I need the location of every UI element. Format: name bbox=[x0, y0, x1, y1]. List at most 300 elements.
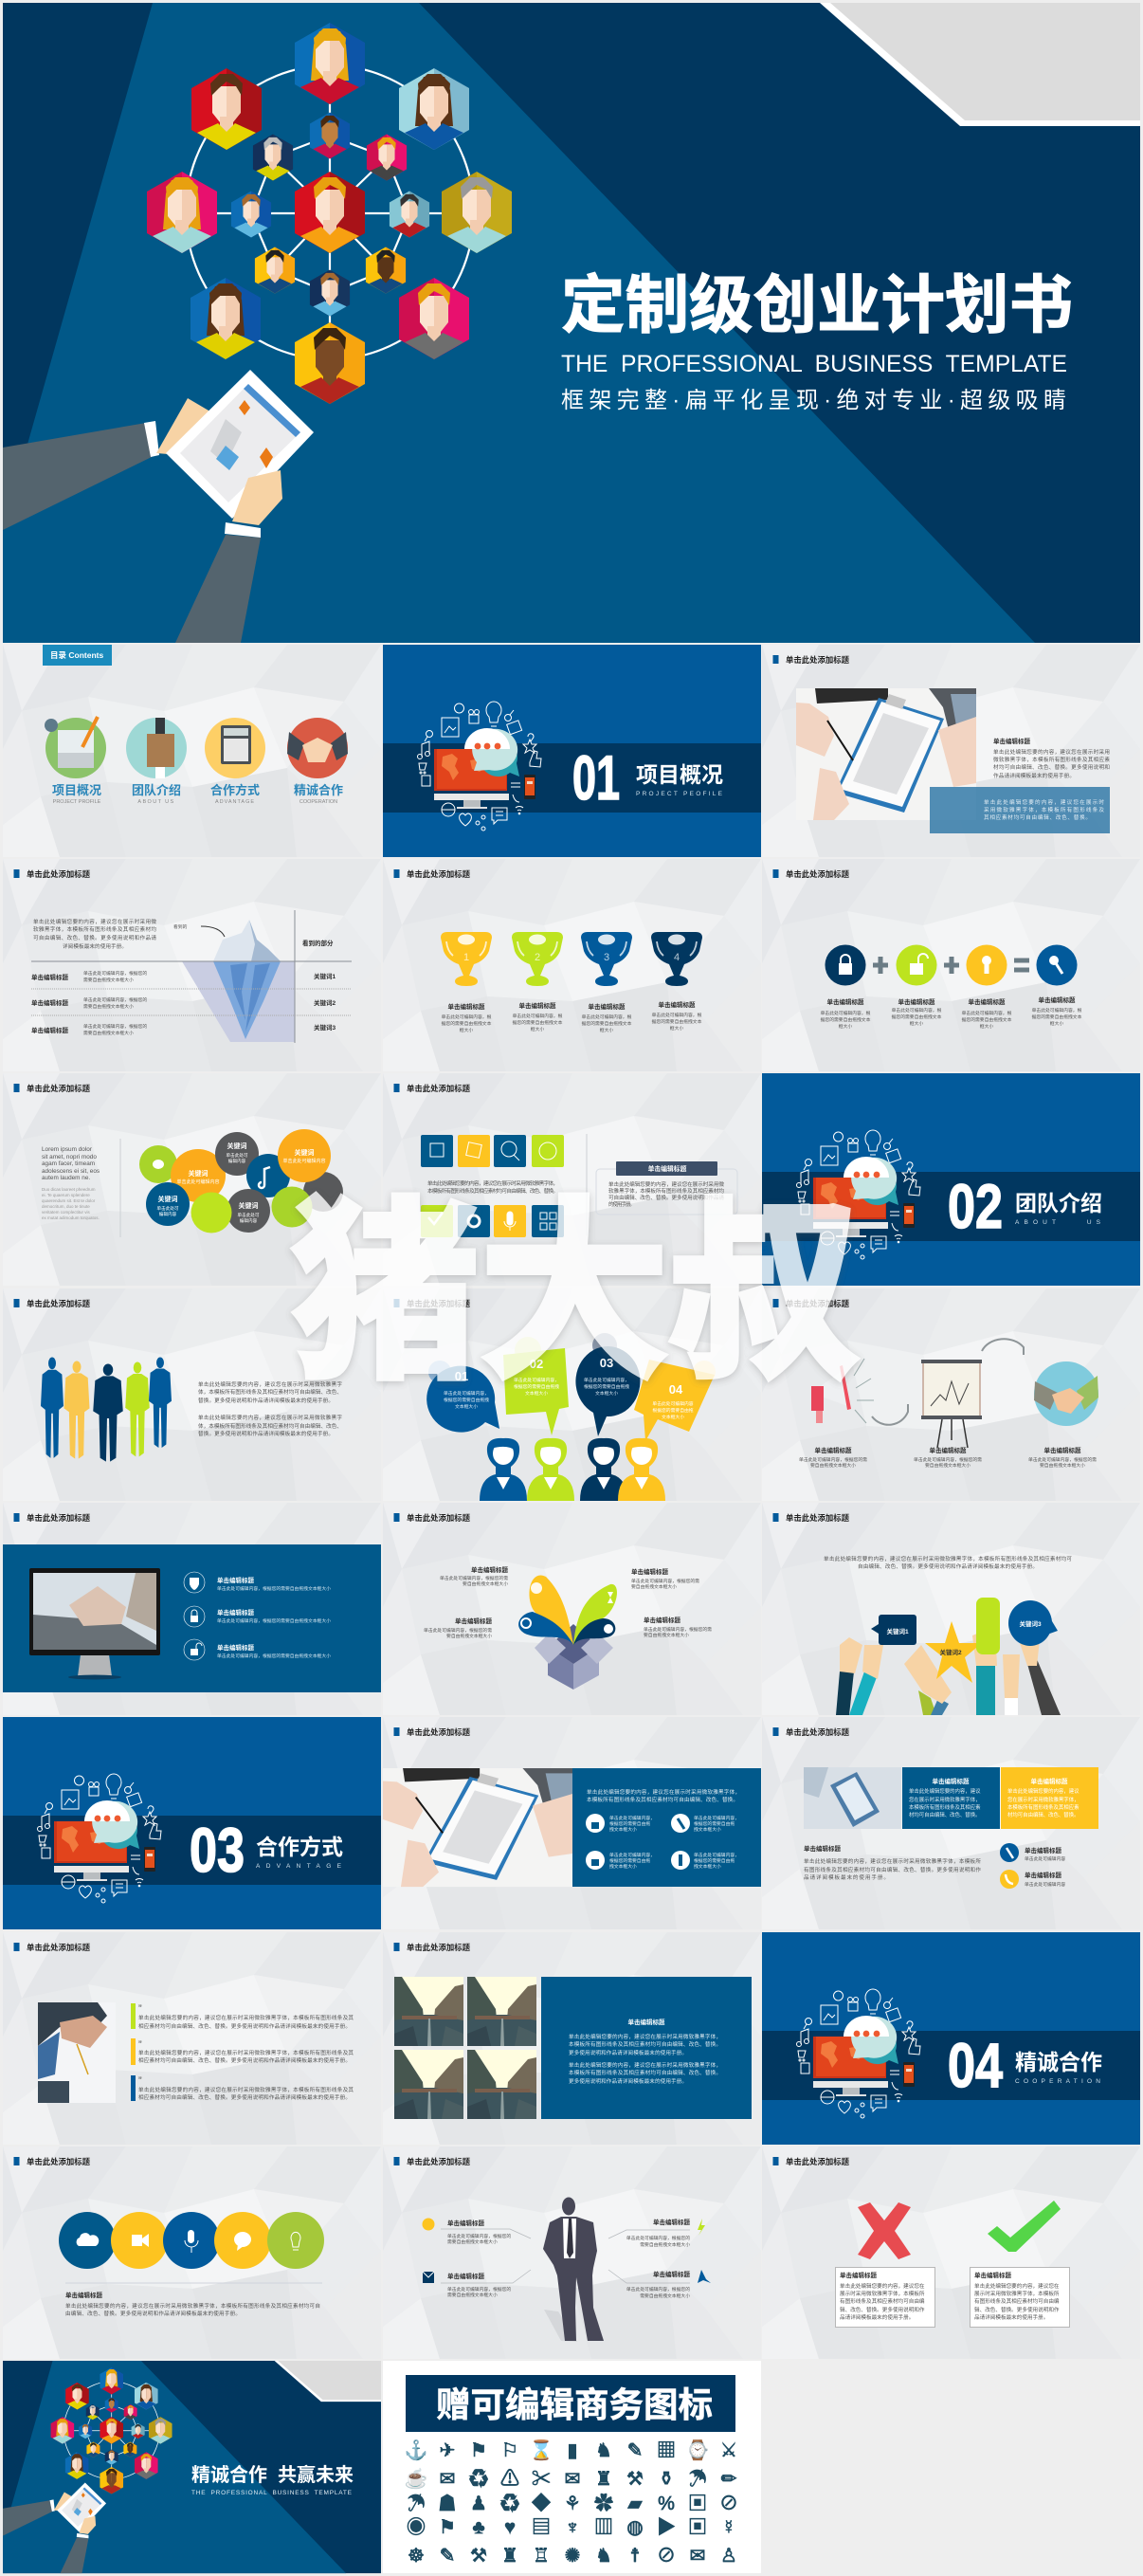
blue card: 单击编辑标题 bbox=[933, 1777, 970, 1785]
icon: megaphone bbox=[811, 1359, 874, 1423]
caption right top: 单击此处可编辑内容，根据您的需 bbox=[631, 1578, 699, 1584]
panel: businessman slide bbox=[383, 2147, 761, 2359]
blue panel: 根据您的需要自由拖 bbox=[694, 1857, 735, 1864]
bubble 1: 01 bbox=[455, 1369, 468, 1383]
closing title: 精诚合作 共赢未来 bbox=[191, 2464, 354, 2486]
contents tag bbox=[43, 645, 112, 666]
note card bbox=[596, 1161, 737, 1215]
tile text: 单击此处编辑您要的内容，建议您在展示时采用微软雅黑字体， bbox=[427, 1179, 558, 1187]
caption left top bbox=[440, 1565, 508, 1587]
panel: speech bubbles slide bbox=[383, 1288, 761, 1501]
equation captions: 框大小 bbox=[839, 1023, 852, 1030]
bubble 3 bbox=[575, 1333, 640, 1436]
icon list: 单击编辑标题 bbox=[1025, 1871, 1061, 1879]
panel: process slide bbox=[762, 1288, 1140, 1501]
trophy captions: 单击此处可编辑内容，根 bbox=[442, 1014, 492, 1020]
iceberg rows: 需要自由拖拽文本框大小 bbox=[83, 1030, 134, 1036]
feature list: 单击此处可编辑内容，根据您的需要自由拖拽文本框大小 bbox=[217, 1617, 331, 1624]
note card: 软雅黑字体，本模板所有图形线条及其相应素材均 bbox=[608, 1187, 724, 1195]
blue panel bbox=[572, 1768, 761, 1887]
arrow bbox=[201, 926, 225, 937]
contents labels: 项目概况 bbox=[52, 783, 101, 797]
caption left bottom: 单击此处可编辑内容，根据您的需 bbox=[424, 1627, 492, 1634]
iceberg rows: 单击编辑标题 bbox=[31, 973, 68, 981]
bubble 4: 根据您的需要自由拖 bbox=[652, 1407, 694, 1414]
callout bottom-left: 单击编辑标题 bbox=[447, 2272, 485, 2280]
icon: project overview laptop bbox=[45, 717, 106, 778]
trophies: 1 bbox=[463, 952, 469, 963]
lorem text: Duo dicas laoreet pheedrum bbox=[42, 1187, 96, 1192]
text block: 作品请详阅模板最末的使用手册。 bbox=[993, 772, 1075, 779]
trophy captions: 单击编辑标题 bbox=[588, 1002, 626, 1011]
keyword 3 bubble: 关键词3 bbox=[1019, 1619, 1042, 1628]
blue card bbox=[902, 1767, 1000, 1829]
trophy captions bbox=[442, 1000, 702, 1033]
keyword 1 bubble bbox=[871, 1615, 916, 1645]
business icon grid: ⚓✈⚑⚐⌛▮♞✎▦⌚⚔ bbox=[405, 2439, 737, 2461]
iceberg text: 单击此处编辑您要的内容，建议您在展示时采用微 bbox=[33, 918, 156, 925]
yellow card: 材均可自由编辑、改色、替换。 bbox=[1007, 1811, 1079, 1818]
blue card: 您在展示时采用微软雅黑字体， bbox=[909, 1796, 980, 1803]
intro text: 单击此处编辑您要的内容，建议您在展示时采用微软雅黑字体，本模板所有图形线条及其相应素材均可 bbox=[824, 1555, 1072, 1562]
slide heading: 单击此处添加标题 bbox=[786, 869, 850, 879]
note card: 可自由编辑、改色、替换。更多使用说明和作品请 bbox=[608, 1194, 724, 1201]
quote text: 相应素材均可自由编辑、改色、替换。更多使用说明和作品请详阅模板最末的使用手册。 bbox=[138, 2056, 351, 2064]
slide heading: 单击此处添加标题 bbox=[27, 1513, 91, 1523]
caption left bottom bbox=[424, 1617, 493, 1639]
equation captions: 单击此处可编辑内容，根 bbox=[962, 1010, 1012, 1016]
trophy captions: 框大小 bbox=[600, 1027, 613, 1033]
contents tag: 目录 Contents bbox=[50, 650, 103, 660]
section title: 合作方式 bbox=[256, 1835, 343, 1859]
bubble 4 bbox=[634, 1360, 716, 1441]
panel: icon set promo bbox=[383, 2361, 761, 2573]
slide heading: 单击此处添加标题 bbox=[27, 1084, 91, 1093]
iceberg text: 详阅模板最末的使用手册。 bbox=[63, 942, 127, 950]
trophy captions: 据您的需要自由拖拽文本 bbox=[652, 1018, 702, 1025]
contents English labels: ADVANTAGE bbox=[215, 799, 255, 805]
bubble cluster: 编辑内容 bbox=[228, 1158, 246, 1164]
bubble 1 bbox=[426, 1361, 499, 1433]
bubble 1: 根据您的需要自由拖拽 bbox=[444, 1397, 489, 1403]
iceberg rows bbox=[31, 970, 147, 1036]
blue panel: 单击此处可编辑内容， bbox=[609, 1852, 655, 1858]
feature list bbox=[184, 1572, 331, 1660]
caption right bottom: 单击编辑标题 bbox=[644, 1616, 680, 1624]
blue panel: 根据您的需要自由拖 bbox=[609, 1820, 650, 1827]
trophy captions: 据您的需要自由拖拽文本 bbox=[442, 1020, 492, 1027]
slide heading: 单击此处添加标题 bbox=[407, 1727, 471, 1737]
bubble cluster: 单击此处可 bbox=[238, 1212, 260, 1218]
note box right: 辑、改色、替换。更多使用说明和作 bbox=[974, 2306, 1060, 2313]
blue band bbox=[3, 1544, 381, 1692]
callout bottom-right bbox=[626, 2270, 711, 2299]
trophies bbox=[441, 932, 702, 986]
left text bbox=[804, 1844, 981, 1881]
trophy captions: 单击此处可编辑内容，根 bbox=[513, 1013, 563, 1019]
section subtitle: ADVANTAGE bbox=[256, 1863, 342, 1870]
bubble cluster: 关键词 bbox=[239, 1201, 258, 1210]
iceberg text bbox=[33, 918, 156, 950]
icon: red cross bbox=[858, 2202, 911, 2259]
slide heading: 单击此处添加标题 bbox=[786, 1299, 850, 1308]
cover tagline: 框架完整·扁平化呈现·绝对专业·超级吸睛 bbox=[561, 388, 1066, 413]
section number: 03 bbox=[190, 1815, 245, 1885]
businessman silhouette bbox=[543, 2198, 604, 2342]
bubble 4: 04 bbox=[669, 1382, 683, 1397]
slide heading: 单击此处添加标题 bbox=[27, 2157, 91, 2166]
lorem text: adolescens ei sit, eos bbox=[42, 1168, 100, 1175]
icon tiles bbox=[421, 1135, 564, 1237]
bubble 3: 03 bbox=[600, 1356, 613, 1370]
cover title: 定制级创业计划书 bbox=[561, 270, 1073, 341]
lorem text: ex mutat adimodum torquatos. bbox=[42, 1215, 100, 1220]
blue panel: 根据您的需要自由拖 bbox=[694, 1820, 735, 1827]
iceberg rows: 需要自由拖拽文本框大小 bbox=[83, 1003, 134, 1010]
equation captions: 单击此处可编辑内容，根 bbox=[1032, 1007, 1082, 1014]
caption bbox=[65, 2291, 320, 2317]
business icon grid: ☸✎⚒♜♖✺♞☨⊘✉♙ bbox=[408, 2546, 737, 2567]
equation captions: 单击编辑标题 bbox=[826, 997, 864, 1006]
panel: section 01 bbox=[383, 645, 761, 857]
icon: green check bbox=[988, 2201, 1061, 2252]
equation icons bbox=[825, 944, 1077, 986]
equation captions: 框大小 bbox=[910, 1020, 923, 1027]
feature list: 单击此处可编辑内容，根据您的需要自由拖拽文本框大小 bbox=[217, 1653, 331, 1659]
contents English labels bbox=[53, 799, 337, 805]
cycle arrows bbox=[872, 1339, 1024, 1425]
iceberg labels: 关键词2 bbox=[314, 998, 336, 1007]
text block bbox=[993, 737, 1110, 779]
contract photo bbox=[796, 688, 976, 820]
process captions: 要自由拖拽文本框大小 bbox=[1040, 1462, 1085, 1469]
panel: quotes slide bbox=[3, 1932, 381, 2145]
feature list: 单击编辑标题 bbox=[217, 1643, 254, 1652]
slide heading: 单击此处添加标题 bbox=[27, 1299, 91, 1308]
yellow card: 您在展示时采用微软雅黑字体， bbox=[1007, 1796, 1079, 1803]
text block: 单击此处编辑您要的内容，建议您在展示时采用 bbox=[993, 748, 1110, 756]
panel: contract and icons slide bbox=[383, 1717, 761, 1929]
callout bottom-right: 需要自由拖拽文本框大小 bbox=[640, 2293, 690, 2299]
slide heading: 单击此处添加标题 bbox=[786, 2157, 850, 2166]
bubble 2: 单击此处可编辑内容， bbox=[514, 1377, 559, 1383]
note box right: 有图形线条及其相应素材均可自由编 bbox=[974, 2297, 1060, 2305]
trophy captions: 据您的需要自由拖拽文本 bbox=[513, 1019, 563, 1026]
panel: iceberg slide bbox=[3, 859, 381, 1071]
lorem text: ei. Te quaerum splendere bbox=[42, 1193, 90, 1197]
iceberg rows: 单击此处可编辑内容，根据您的 bbox=[83, 996, 147, 1003]
callout top-left bbox=[423, 2219, 511, 2245]
bubble cluster: 单击此处可 bbox=[157, 1205, 179, 1212]
process captions: 单击此处可编辑内容，根据您的需 bbox=[1028, 1456, 1097, 1463]
note box right: 单击此处编辑您要的内容，建议您在 bbox=[974, 2282, 1060, 2290]
icon list: 单击此处可编辑内容 bbox=[1025, 1881, 1065, 1888]
bubble cluster: 单击此处可编辑内容 bbox=[176, 1178, 220, 1185]
team text: 单击此处编辑您要的内容，建议您在展示时采用微软雅黑字 bbox=[198, 1380, 342, 1388]
keyword 1 bubble: 关键词1 bbox=[886, 1627, 909, 1635]
contents English labels: ABOUT US bbox=[137, 799, 175, 805]
caption right bottom: 单击此处可编辑内容，根据您的需 bbox=[644, 1626, 712, 1633]
yellow card: 单击编辑标题 bbox=[1031, 1777, 1068, 1785]
business icon grid: ☕✉♻⚠✂✉♜⚒⚱☂✏ bbox=[405, 2467, 737, 2490]
trophy captions: 单击此处可编辑内容，根 bbox=[652, 1012, 702, 1018]
equation captions: 单击编辑标题 bbox=[898, 997, 935, 1006]
caption left top: 单击此处可编辑内容，根据您的需 bbox=[440, 1575, 508, 1581]
slide heading: 单击此处添加标题 bbox=[27, 1943, 91, 1952]
slide heading: 单击此处添加标题 bbox=[786, 1513, 850, 1523]
blue text panel: 单击此处编辑您要的内容，建议您在展示时采用微软雅黑字体， bbox=[569, 2061, 721, 2069]
blue panel: 单击此处编辑您要的内容，建议您在展示时采用微软雅黑字体， bbox=[587, 1788, 740, 1796]
blue panel: 拽文本框大小 bbox=[609, 1863, 637, 1870]
tile text: 本模板所有图形线条及其相应素材均可自由编辑、改色、替换。 bbox=[427, 1187, 558, 1195]
contents labels: 合作方式 bbox=[210, 783, 260, 797]
cover artwork: avatar network and tablet bbox=[3, 3, 1140, 643]
iceberg labels: 关键词1 bbox=[314, 972, 336, 980]
lorem text: democritum, duo te tinute bbox=[42, 1204, 90, 1209]
equation captions: 据您的需要自由拖拽文本 bbox=[892, 1014, 942, 1020]
bubble 3: 文本框大小 bbox=[595, 1390, 618, 1397]
iceberg rows: 需要自由拖拽文本框大小 bbox=[83, 977, 134, 983]
people busts bbox=[480, 1438, 665, 1501]
intro text bbox=[824, 1555, 1072, 1570]
bubble 2: 文本框大小 bbox=[525, 1390, 548, 1397]
callout top-right: 单击编辑标题 bbox=[653, 2218, 690, 2226]
callout bottom-right: 单击此处可编辑内容，根据您的 bbox=[626, 2286, 690, 2293]
process captions: 单击编辑标题 bbox=[929, 1446, 967, 1454]
iceberg rows: 单击此处可编辑内容，根据您的 bbox=[83, 970, 147, 977]
blue callout: 其相应素材均可自由编辑、改色、替换。 bbox=[984, 813, 1091, 821]
bubble cluster: 单击此处可 bbox=[227, 1152, 248, 1159]
equation captions: 据您的需要自由拖拽文本 bbox=[821, 1016, 871, 1023]
left text: 品请详阅模板最末的使用手册。 bbox=[804, 1873, 889, 1881]
raised hands bbox=[836, 1626, 1061, 1715]
bubble 2: 根据您的需要自由拖拽 bbox=[514, 1383, 559, 1390]
note card: 单击编辑标题 bbox=[648, 1164, 687, 1173]
text block: 单击编辑标题 bbox=[993, 737, 1031, 745]
closing subtitle: THE PROFESSIONAL BUSINESS TEMPLATE bbox=[191, 2490, 353, 2496]
panel: closing slide bbox=[3, 2361, 381, 2573]
bubble cluster: 单击此处可编辑内容 bbox=[282, 1158, 326, 1164]
bubble 4: 单击此处可编辑内容 bbox=[652, 1400, 694, 1407]
bubble cluster: 编辑内容 bbox=[240, 1217, 258, 1224]
process captions: 要自由拖拽文本框大小 bbox=[925, 1462, 971, 1469]
iceberg labels: 看到的部分 bbox=[302, 939, 334, 947]
blue card: 材均可自由编辑、改色、替换。 bbox=[909, 1811, 980, 1818]
section subtitle: ABOUT US bbox=[1015, 1219, 1101, 1226]
trophies: 2 bbox=[535, 952, 540, 963]
panel: icon tiles slide bbox=[383, 1073, 761, 1286]
blue panel: 本模板所有图形线条及其相应素材均可自由编辑、改色、替换。 bbox=[587, 1796, 738, 1803]
team text: 体，本模板所有图形线条及其相应素材均可自由编辑、改色、 bbox=[198, 1388, 342, 1396]
section title: 团队介绍 bbox=[1015, 1191, 1102, 1215]
quote text: 单击此处编辑您要的内容，建议您在展示时采用微软雅黑字体，本模板所有图形线条及其 bbox=[138, 2049, 354, 2056]
iceberg text: 软雅黑字体，本模板所有图形线条及其相应素材均 bbox=[33, 925, 156, 933]
watermark: 猪大叔 bbox=[290, 1185, 859, 1402]
callout bottom-left bbox=[423, 2272, 511, 2298]
blue panel: 拽文本框大小 bbox=[694, 1826, 721, 1833]
panel: cover slide bbox=[3, 3, 1140, 643]
business icon grid bbox=[405, 2439, 738, 2567]
tile text bbox=[427, 1179, 558, 1195]
quote text: 单击此处编辑您要的内容，建议您在展示时采用微软雅黑字体，本模板所有图形线条及其 bbox=[138, 2014, 354, 2021]
trophy captions: 框大小 bbox=[460, 1027, 473, 1033]
blue panel: 拽文本框大小 bbox=[609, 1826, 637, 1833]
note box wrong: 有图形线条及其相应素材均可自由编 bbox=[840, 2297, 925, 2305]
panel: lock equation slide bbox=[762, 859, 1140, 1071]
left text: 单击编辑标题 bbox=[804, 1844, 842, 1853]
note box wrong: 单击此处编辑您要的内容，建议您在 bbox=[840, 2282, 925, 2290]
bubble 2 bbox=[503, 1337, 569, 1435]
trophies: 3 bbox=[604, 952, 609, 963]
note box wrong bbox=[836, 2268, 934, 2327]
lorem text: agam facer, timeam bbox=[42, 1160, 95, 1167]
blue text panel bbox=[541, 1977, 752, 2119]
yellow card: 本模板所有图形线条及其相应素 bbox=[1007, 1803, 1080, 1811]
trophy captions: 单击此处可编辑内容，根 bbox=[582, 1014, 632, 1020]
yellow card: 单击此处编辑您要的内容，建议 bbox=[1007, 1787, 1080, 1795]
blue card: 单击此处编辑您要的内容，建议 bbox=[909, 1787, 981, 1795]
tablet photo bbox=[804, 1767, 901, 1829]
process captions: 单击此处可编辑内容，根据您的需 bbox=[914, 1456, 982, 1463]
note box wrong: 单击编辑标题 bbox=[840, 2271, 878, 2279]
quote text: ” bbox=[138, 2003, 142, 2015]
slide heading: 单击此处添加标题 bbox=[27, 869, 91, 879]
bubble 3: 根据您的需要自由拖拽 bbox=[584, 1383, 629, 1390]
icon list bbox=[1000, 1843, 1065, 1889]
team text: 替换。更多使用说明和作品请详阅模板最末的使用手册。 bbox=[198, 1397, 334, 1404]
blue panel: 拽文本框大小 bbox=[694, 1863, 721, 1870]
panel: five circles slide bbox=[3, 2147, 381, 2359]
lorem text: veritatem complectitur vis bbox=[42, 1210, 91, 1215]
trophy captions: 单击编辑标题 bbox=[447, 1002, 485, 1011]
trophy captions: 单击编辑标题 bbox=[519, 1001, 556, 1010]
caption: 单击编辑标题 bbox=[65, 2291, 102, 2299]
bubble 1: 文本框大小 bbox=[455, 1403, 478, 1410]
bubble 3: 单击此处可编辑内容， bbox=[584, 1377, 629, 1383]
lorem text: Lorem ipsum dolor bbox=[42, 1146, 93, 1153]
cover English subtitle: THE PROFESSIONAL BUSINESS TEMPLATE bbox=[561, 351, 1067, 377]
process captions: 要自由拖拽文本框大小 bbox=[810, 1462, 856, 1469]
text block: 微软雅黑字体，本模板所有图形线条及其相应素 bbox=[993, 756, 1110, 763]
slide heading: 单击此处添加标题 bbox=[407, 869, 471, 879]
contents labels bbox=[52, 783, 343, 797]
iceberg labels: 看到的 bbox=[173, 923, 188, 930]
lorem text: sit amet, nopri modo bbox=[42, 1154, 97, 1160]
caption: 单击此处编辑您要的内容，建议您在展示时采用微软雅黑字体，本模板所有图形线条及其相应素材均可自 bbox=[65, 2302, 320, 2310]
note card: 的使用手册。 bbox=[608, 1200, 635, 1208]
process captions: 单击编辑标题 bbox=[1044, 1446, 1081, 1454]
bubble 1: 单击此处可编辑内容， bbox=[444, 1390, 489, 1397]
caption right bottom bbox=[644, 1616, 712, 1638]
keyword 2 star: 关键词2 bbox=[939, 1648, 962, 1656]
icon list: 单击此处可编辑内容 bbox=[1025, 1855, 1065, 1862]
iceberg labels bbox=[173, 923, 336, 1032]
yellow card bbox=[1001, 1767, 1098, 1829]
caption right top: 要自由拖拽文本框大小 bbox=[631, 1583, 677, 1590]
panel: monitor slide bbox=[3, 1503, 381, 1715]
lorem text bbox=[42, 1146, 100, 1220]
callout bottom-left: 需要自由拖拽文本框大小 bbox=[447, 2292, 498, 2298]
keyword 3 bubble bbox=[1008, 1600, 1058, 1646]
note box right: 单击编辑标题 bbox=[974, 2271, 1012, 2279]
feature list: 单击编辑标题 bbox=[217, 1608, 254, 1617]
monitor photo bbox=[29, 1568, 160, 1680]
panel: section 02 bbox=[762, 1073, 1140, 1286]
panel: contents slide bbox=[3, 645, 381, 857]
slide heading: 单击此处添加标题 bbox=[786, 655, 850, 665]
connector lines bbox=[441, 2229, 690, 2283]
panel: trophy slide bbox=[383, 859, 761, 1071]
equation captions: 单击此处可编辑内容，根 bbox=[892, 1007, 942, 1014]
blue callout: 采用微软雅黑字体，本模板所有图形线条及 bbox=[984, 806, 1104, 813]
blue text panel: 本模板所有图形线条及其相应素材均可自由编辑、改色、替换。 bbox=[569, 2040, 721, 2048]
equation captions: 据您的需要自由拖拽文本 bbox=[962, 1016, 1012, 1023]
five circles bbox=[59, 2212, 324, 2269]
slide heading: 单击此处添加标题 bbox=[407, 1943, 471, 1952]
blue panel: 单击此处可编辑内容， bbox=[609, 1815, 655, 1821]
promo banner bbox=[406, 2375, 735, 2432]
panel: growth box slide bbox=[383, 1503, 761, 1715]
bubble cluster bbox=[139, 1129, 343, 1233]
note box wrong: 品请详阅模板最末的使用手册。 bbox=[840, 2313, 914, 2321]
caption left bottom: 单击编辑标题 bbox=[455, 1617, 493, 1625]
icon list: 单击编辑标题 bbox=[1025, 1846, 1061, 1854]
note box right: 展示时采用微软雅黑字体，本模板所 bbox=[974, 2290, 1060, 2297]
left text: 有图形线条及其相应素材均可自由编辑、改色、替换。更多使用说明和作 bbox=[804, 1866, 981, 1873]
iceberg text: 可自由编辑、改色、替换。更多使用说明和作品请 bbox=[33, 934, 156, 941]
team silhouettes bbox=[41, 1358, 172, 1462]
caption right top: 单击编辑标题 bbox=[631, 1567, 669, 1576]
equation captions: 单击此处可编辑内容，根 bbox=[821, 1010, 871, 1016]
note box right bbox=[971, 2268, 1069, 2327]
panel: raised hands slide bbox=[762, 1503, 1140, 1715]
icon: calculator bbox=[205, 718, 265, 778]
note card: 单击此处编辑您要的内容，建议您在展示时采用微 bbox=[608, 1180, 724, 1188]
slide heading: 单击此处添加标题 bbox=[407, 1299, 471, 1308]
panel: street photos slide bbox=[383, 1932, 761, 2145]
closing artwork bbox=[3, 2361, 381, 2573]
bubble cluster: 关键词 bbox=[227, 1142, 246, 1150]
contents English labels: PROJECT PROFILE bbox=[53, 799, 101, 805]
bubble cluster: 关键词 bbox=[157, 1195, 178, 1203]
quote text: ” bbox=[138, 2075, 142, 2087]
equation captions: 框大小 bbox=[1050, 1020, 1063, 1027]
blue text panel: 更多使用说明和作品请详阅模板最末的使用手册。 bbox=[569, 2077, 687, 2085]
icon: handshake circle bbox=[1034, 1361, 1098, 1426]
blue text panel: 本模板所有图形线条及其相应素材均可自由编辑、改色、替换。 bbox=[569, 2069, 721, 2076]
plant box graphic bbox=[518, 1576, 617, 1690]
trophy captions: 单击编辑标题 bbox=[658, 1000, 696, 1009]
panel: section 03 bbox=[3, 1717, 381, 1929]
trophy captions: 据您的需要自由拖拽文本 bbox=[582, 1020, 632, 1027]
panel: section 04 bbox=[762, 1932, 1140, 2145]
bubble cluster: 关键词 bbox=[294, 1148, 315, 1157]
blue text panel: 单击此处编辑您要的内容，建议您在展示时采用微软雅黑字体， bbox=[569, 2033, 721, 2040]
callout top-right bbox=[626, 2218, 705, 2248]
panel: contract slide bbox=[762, 645, 1140, 857]
equation captions: 据您的需要自由拖拽文本 bbox=[1032, 1014, 1082, 1020]
blue panel: 根据您的需要自由拖 bbox=[609, 1857, 650, 1864]
quote text: 相应素材均可自由编辑、改色、替换。更多使用说明和作品请详阅模板最末的使用手册。 bbox=[138, 2022, 351, 2030]
section number: 04 bbox=[948, 2030, 1003, 2100]
callout top-right: 需要自由拖拽文本框大小 bbox=[640, 2241, 690, 2248]
callout top-left: 单击此处可编辑内容，根据您的 bbox=[447, 2233, 511, 2239]
bubble cluster: 编辑内容 bbox=[159, 1211, 177, 1217]
caption right bottom: 要自由拖拽文本框大小 bbox=[644, 1632, 689, 1638]
bubble 2: 02 bbox=[530, 1357, 543, 1371]
team text: 单击此处编辑您要的内容，建议您在展示时采用微软雅黑字 bbox=[198, 1414, 342, 1421]
iceberg labels: 关键词3 bbox=[314, 1023, 336, 1032]
